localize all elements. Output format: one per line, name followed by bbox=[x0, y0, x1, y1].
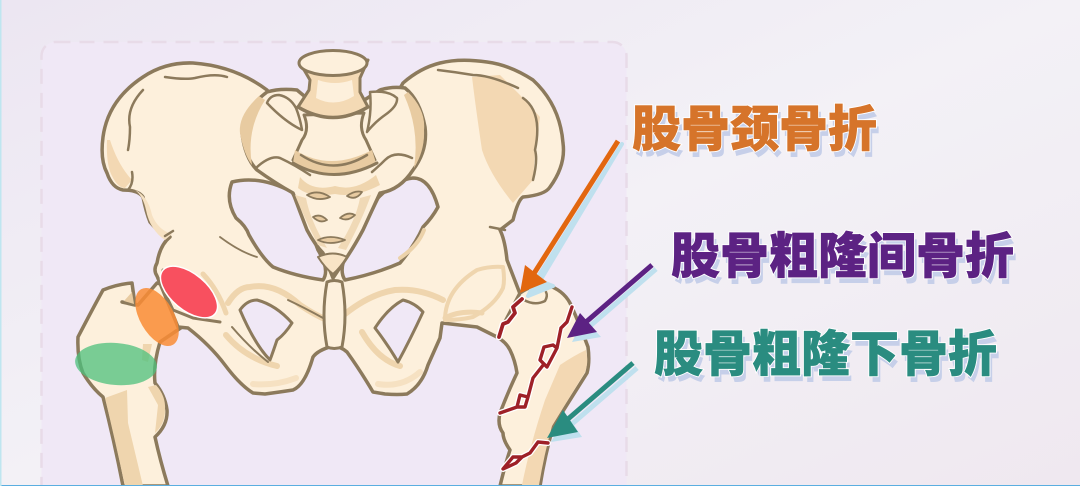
left femur bbox=[78, 283, 185, 486]
pelvis shaded bands bbox=[228, 286, 327, 320]
lower vertebra bbox=[293, 113, 375, 172]
label: 股骨粗隆间骨折: 股骨粗隆间骨折 bbox=[671, 230, 1014, 284]
label: 股骨颈骨折: 股骨颈骨折 bbox=[632, 103, 877, 157]
obturator holes bbox=[240, 300, 292, 360]
arrow: purple to intertrochanteric bbox=[567, 265, 656, 342]
arrow: teal to subtrochanteric bbox=[547, 363, 637, 442]
label: 股骨粗隆间骨折: 股骨粗隆间骨折 bbox=[674, 236, 1017, 290]
illustration: pelvis and femurs bbox=[78, 50, 589, 486]
ilium shading bbox=[107, 140, 132, 188]
label: 股骨粗隆下骨折: 股骨粗隆下骨折 bbox=[657, 334, 1000, 388]
sacrum bbox=[242, 87, 426, 278]
label: 股骨颈骨折: 股骨颈骨折 bbox=[635, 109, 880, 163]
arrow: orange to femoral neck bbox=[520, 141, 622, 296]
label: 股骨粗隆间骨折: 股骨粗隆间骨折 bbox=[671, 230, 1014, 284]
acetabulum socket rim bbox=[160, 270, 220, 322]
pelvis bbox=[102, 60, 563, 394]
pubic symphysis bbox=[324, 280, 345, 348]
label: 股骨粗隆下骨折: 股骨粗隆下骨折 bbox=[654, 328, 997, 382]
right femur bbox=[497, 285, 589, 486]
fracture: femoral neck bbox=[499, 299, 522, 337]
highlight: trochanter (green) bbox=[73, 340, 159, 388]
highlight: femoral neck (orange) bbox=[126, 281, 188, 353]
pelvic inlet bbox=[229, 180, 326, 280]
panel: dashed backdrop bbox=[42, 42, 626, 486]
ilium contour lines bbox=[128, 70, 537, 190]
fracture: subtrochanteric bbox=[503, 442, 548, 469]
highlight: femoral head (red) bbox=[151, 256, 227, 328]
sacrum and vertebrae bbox=[240, 50, 426, 278]
label: 股骨颈骨折: 股骨颈骨折 bbox=[632, 103, 877, 157]
fracture: intertrochanteric bbox=[500, 307, 572, 413]
upper vertebra bbox=[298, 60, 368, 118]
sacral wing shading bbox=[240, 92, 424, 168]
sacral facets bbox=[267, 95, 302, 130]
label: 股骨粗隆下骨折: 股骨粗隆下骨折 bbox=[654, 328, 997, 382]
